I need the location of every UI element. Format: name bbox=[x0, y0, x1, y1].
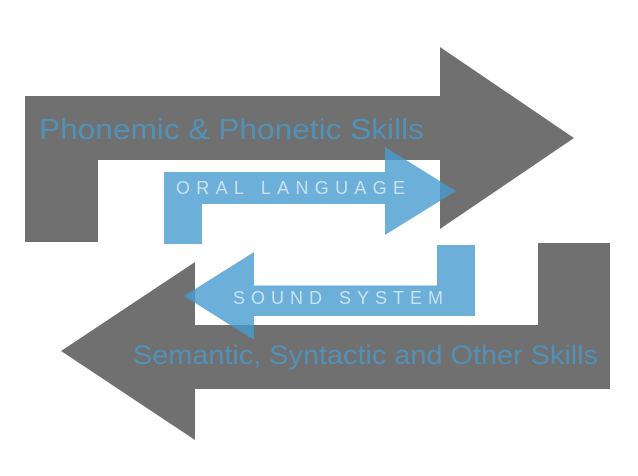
arrow: blue left-pointing sound system arrow bbox=[184, 245, 475, 340]
arrow: blue right-pointing oral language arrow bbox=[164, 147, 456, 244]
heading: Phonemic & Phonetic Skills: Phonemic & Phonetic Skills bbox=[39, 114, 424, 146]
arrow: grey right-pointing upper arrow bbox=[25, 47, 574, 242]
heading: Semantic, Syntactic and Other Skills: Semantic, Syntactic and Other Skills bbox=[133, 340, 598, 370]
label: SOUND SYSTEM: SOUND SYSTEM bbox=[233, 288, 443, 308]
label: ORAL LANGUAGE: ORAL LANGUAGE bbox=[176, 178, 405, 198]
arrow: grey left-pointing lower arrow bbox=[61, 243, 610, 440]
